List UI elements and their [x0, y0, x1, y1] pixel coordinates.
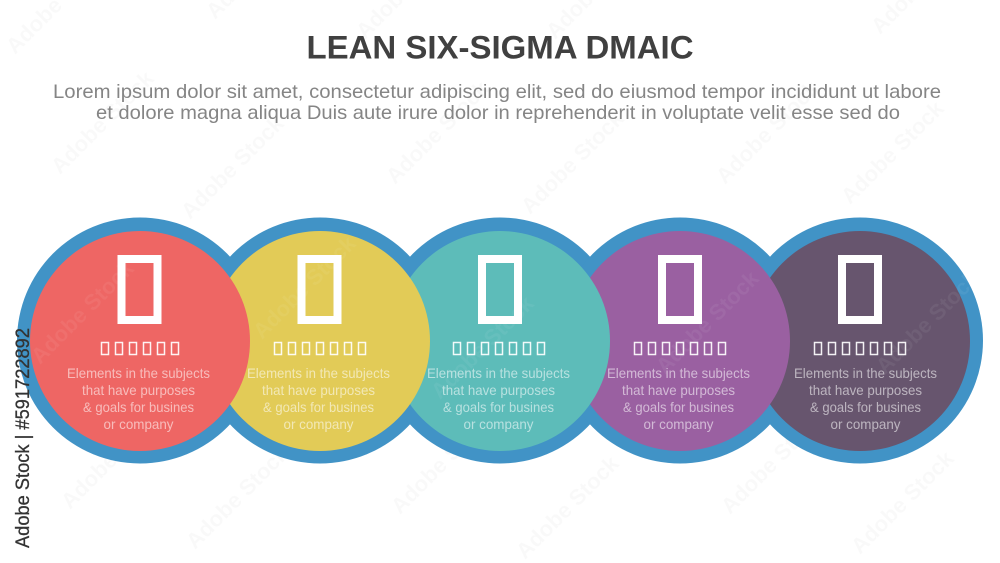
text block: that have purposes: [82, 382, 195, 398]
text block: that have purposes: [622, 382, 735, 398]
heading: placeholder glyphs: [814, 342, 906, 354]
background watermark pattern: Adobe Stock: [56, 400, 169, 514]
icon: placeholder glyph: [842, 259, 878, 320]
text block: [247, 365, 390, 432]
text block: or company: [284, 416, 354, 432]
background watermark pattern: Adobe Stock: [716, 405, 829, 519]
text block: & goals for busines: [810, 399, 921, 415]
background watermark pattern: Adobe Stock: [381, 75, 494, 189]
heading: placeholder glyphs: [274, 342, 366, 354]
subtitle text block: Lorem ipsum dolor sit amet, consectetur adipiscing elit, sed do eiusmod tempor incididunt ut labore: [53, 81, 941, 103]
text block: that have purposes: [262, 382, 375, 398]
icon: placeholder glyph: [122, 259, 158, 320]
panel: define (red circle): Adobe Stock: [26, 255, 139, 369]
subtitle text block: et dolore magna aliqua Duis aute irure dolor in reprehenderit in voluptate velit esse sed do: [96, 102, 900, 124]
panel: improve (purple circle): Adobe Stock: [651, 265, 764, 379]
text block: Elements in the subjects: [427, 365, 570, 381]
panel: control (dark plum circle): Adobe Stock: [871, 265, 984, 379]
text block: or company: [464, 416, 534, 432]
background watermark pattern: Adobe Stock: [46, 65, 159, 179]
text block: or company: [830, 416, 900, 432]
panel: define (red circle): [26, 231, 250, 451]
heading: placeholder glyphs: [102, 342, 178, 354]
heading: placeholder glyphs: [454, 342, 544, 354]
panel: improve (purple circle): [570, 231, 790, 451]
text block: & goals for busines: [623, 399, 734, 415]
text block: & goals for busines: [263, 399, 374, 415]
panel: analyze (teal circle): Adobe Stock: [426, 290, 539, 404]
text block: & goals for busines: [443, 399, 554, 415]
text block: that have purposes: [809, 382, 922, 398]
text block: & goals for busines: [83, 399, 194, 415]
text block: or company: [104, 416, 174, 432]
background watermark pattern: Adobe Stock: [511, 450, 624, 563]
text block: [67, 365, 210, 432]
text block: [427, 365, 570, 432]
background watermark pattern: Adobe Stock: [386, 405, 499, 519]
panel: control (dark plum circle): [750, 231, 984, 451]
background watermark pattern: Adobe Stock: [176, 110, 289, 224]
side credit: Adobe Stock | #591722892: [13, 328, 34, 548]
icon: placeholder glyph: [662, 259, 698, 320]
text block: Elements in the subjects: [607, 365, 750, 381]
heading: placeholder glyphs: [634, 342, 726, 354]
background watermark pattern: Adobe Stock: [516, 105, 629, 219]
text block: Elements in the subjects: [247, 365, 390, 381]
panel: measure (yellow circle): Adobe Stock: [248, 230, 361, 344]
icon: placeholder glyph: [482, 259, 518, 320]
text block: or company: [644, 416, 714, 432]
text block: [794, 365, 937, 432]
title: LEAN SIX-SIGMA DMAIC: [306, 30, 694, 66]
blue outer ring chain: [17, 218, 983, 464]
text block: that have purposes: [442, 382, 555, 398]
text block: Elements in the subjects: [794, 365, 937, 381]
text block: Elements in the subjects: [67, 365, 210, 381]
background watermark pattern: Adobe Stock: [846, 445, 959, 559]
subtitle text block: [53, 81, 941, 124]
background watermark pattern: Adobe Stock: [181, 440, 294, 554]
background watermark pattern: Adobe Stock: [836, 95, 949, 209]
text block: [607, 365, 750, 432]
panel: measure (yellow circle): [210, 230, 430, 451]
icon: placeholder glyph: [302, 259, 338, 320]
panel: analyze (teal circle): [390, 231, 610, 451]
background watermark pattern: Adobe Stock: [711, 75, 824, 189]
